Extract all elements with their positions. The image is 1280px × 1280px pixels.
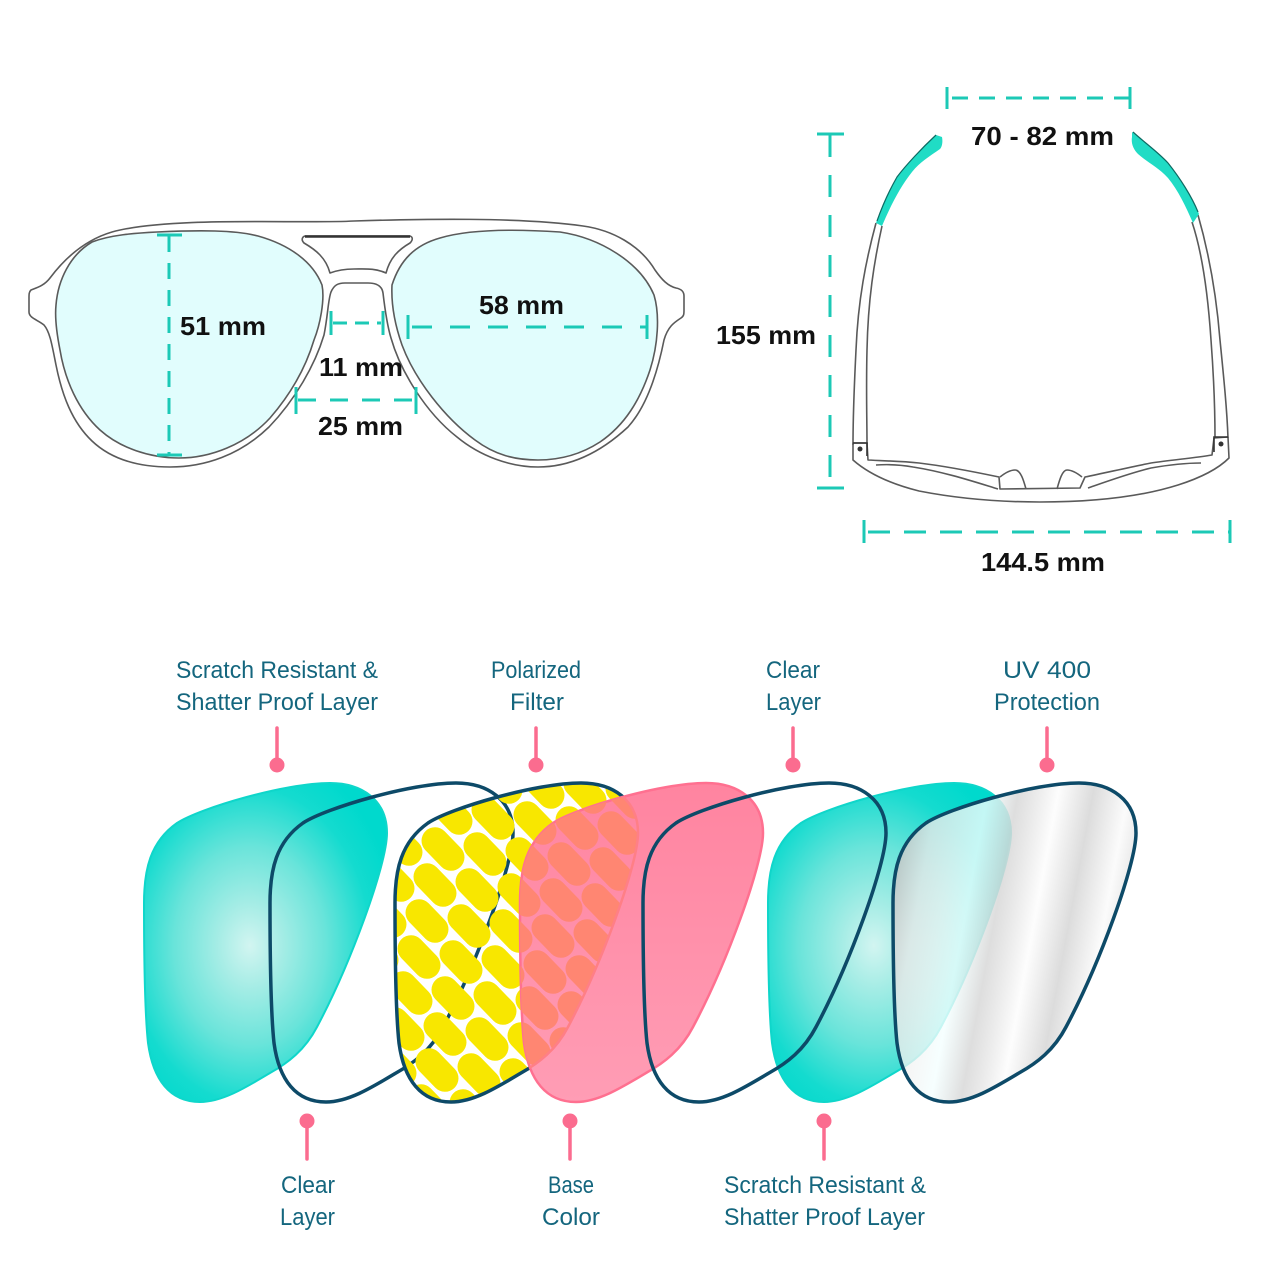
inner lens line right [1088,463,1201,488]
left tip outer dark edge [877,135,936,221]
dimension: bridge 11 mm [319,311,403,382]
dimension: lens width 58 mm: 58 mm [479,290,564,320]
top view of sunglasses [853,132,1229,502]
right tip outer dark edge [1133,132,1198,212]
dimension: nose 25 mm [296,387,416,441]
nose pad right [1057,470,1082,489]
layer 1: teal scratch resistant [144,783,387,1102]
callout: UV 400 protection [994,657,1100,772]
inner lens line left [876,465,998,489]
hinge right [1214,437,1228,452]
callout: polarized filter: Polarized [491,657,581,684]
dimension: temple gap 70-82 mm: 70 - 82 mm [971,121,1114,151]
layer 4: pink base colour [520,783,763,1102]
callout: polarized filter: Filter [510,689,564,716]
callout: clear layer top: Clear [766,657,820,684]
layer 2: clear layer [270,783,513,1102]
callout: scratch resistant bottom [724,1114,926,1231]
dimension: lens height 51 mm [157,235,266,455]
layer 5: clear layer [643,783,886,1102]
dimension: arm length 155 mm: 155 mm [716,320,816,350]
lens layer stack [143,781,1138,1104]
callout: clear layer bottom: Clear [281,1172,335,1199]
yellow pattern seen through pink [520,796,640,1068]
polarized filter outline [395,783,638,1102]
right teal temple tip [1132,132,1199,223]
callout: polarized filter [491,657,581,772]
layer 6: teal scratch resistant [768,783,1011,1102]
layer 3: polarized filter with yellow capsules [396,784,620,1100]
nose pad left [1000,470,1026,489]
bridge [302,236,412,273]
callout: scratch resistant bottom: Shatter Proof Layer [724,1204,925,1231]
right lens [392,230,657,460]
front view of sunglasses [29,219,684,467]
front frame seen from above [853,437,1229,502]
callout: base color: Color [542,1204,600,1231]
layer 7: UV 400 silver [893,783,1136,1102]
bridge top bar [305,235,410,238]
frame outline [29,219,684,467]
left teal temple tip [876,135,942,226]
dimension: temple gap 70-82 mm [947,87,1130,151]
dimension: nose 25 mm: 25 mm [318,411,403,441]
dimension: frame width 144.5 mm: 144.5 mm [981,547,1105,577]
left temple arm [853,223,882,445]
right temple arm [1192,215,1228,438]
dimension: lens height 51 mm: 51 mm [180,311,266,341]
callout: UV 400 protection: UV 400 [1003,657,1091,684]
callout: UV 400 protection: Protection [994,689,1100,716]
callout: clear layer top: Layer [766,689,821,716]
left lens [56,231,323,458]
dimension: frame width 144.5 mm [864,520,1230,577]
dimension: arm length 155 mm [716,134,844,488]
dimension: bridge 11 mm: 11 mm [319,352,403,382]
callout: clear layer top [766,657,821,772]
callout: scratch resistant bottom: Scratch Resistant & [724,1172,926,1199]
hinge left [853,443,867,456]
callout: scratch resistant top: Scratch Resistant & [176,657,378,684]
callout: base color [542,1114,600,1231]
callout: base color: Base [548,1172,594,1199]
dimension: lens width 58 mm [408,290,647,339]
callout: scratch resistant top [176,657,378,772]
callout: clear layer bottom [280,1114,335,1231]
callout: clear layer bottom: Layer [280,1204,335,1231]
callout: scratch resistant top: Shatter Proof Layer [176,689,378,716]
